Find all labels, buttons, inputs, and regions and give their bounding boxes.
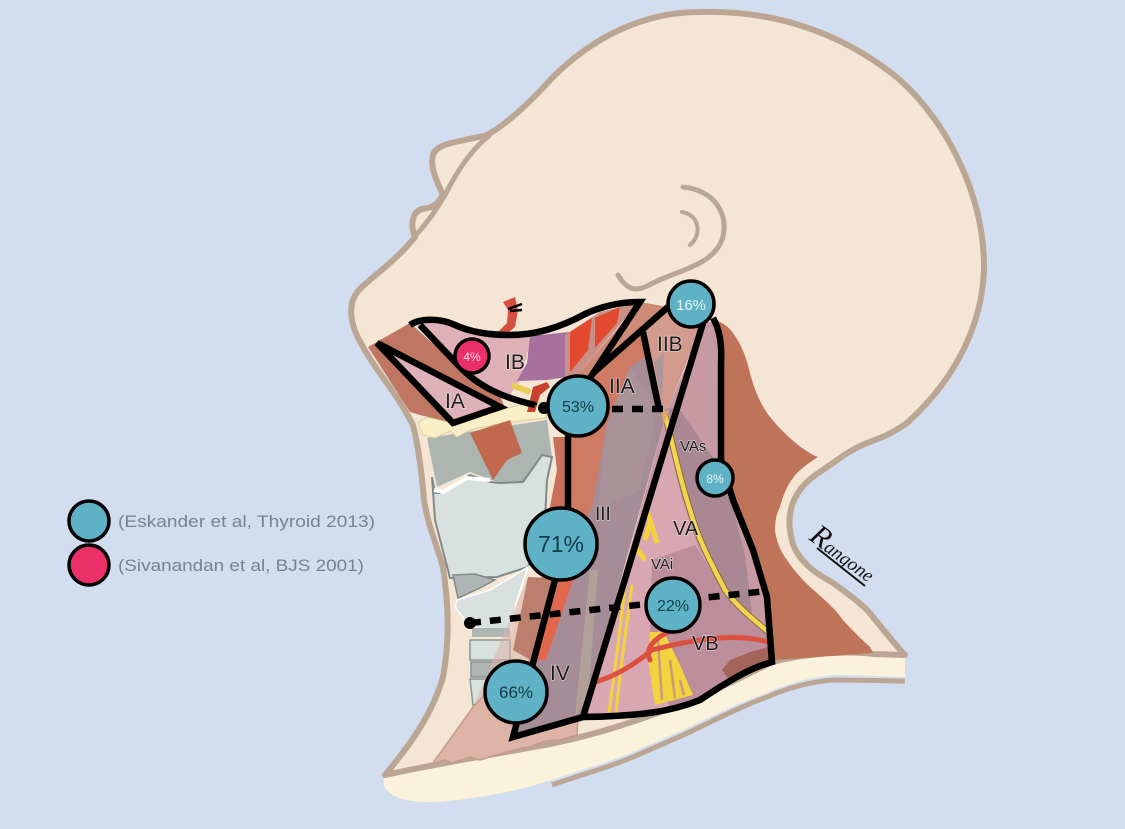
node percentages: 22% <box>657 598 689 615</box>
level labels: IV <box>550 662 570 685</box>
node percentages: 71% <box>538 531 584 557</box>
facial artery <box>497 297 518 337</box>
boundary: level IB <box>410 302 640 405</box>
level labels: IIB <box>657 333 683 356</box>
larynx and trachea <box>427 420 552 705</box>
boundary: posterior triangle oblique <box>583 323 703 717</box>
circle: 16 percent <box>668 281 714 327</box>
node percentages: 53% <box>562 399 594 416</box>
node percentages <box>463 297 724 702</box>
dashed line: II superior-inferior <box>612 406 665 412</box>
jugular and carotid in upper neck <box>565 303 638 378</box>
node percentages: 66% <box>499 683 533 702</box>
submandibular gland <box>517 332 569 381</box>
legend <box>69 501 375 585</box>
level labels: VB <box>692 633 719 655</box>
boundary: level V posterior <box>583 318 772 717</box>
level IIA, III, IV fill <box>513 333 668 737</box>
legend swatch: Sivanandan <box>69 545 109 585</box>
chest lower skin line <box>552 680 905 785</box>
node percentages: 16% <box>676 297 706 314</box>
level labels: VAi <box>651 556 673 573</box>
level IIB fill <box>643 307 703 410</box>
level labels: IA <box>445 390 465 413</box>
legend text: Eskander: (Eskander et al, Thyroid 2013) <box>118 512 375 531</box>
eye and nose inner lines <box>416 135 490 235</box>
dashed line: cricoid level <box>470 591 767 623</box>
circle: 53 percent <box>548 376 608 436</box>
accessory nerve <box>665 415 768 632</box>
node percentages: 8% <box>706 472 724 486</box>
node percentages: 4% <box>463 350 481 364</box>
circle: 4 percent <box>455 339 489 373</box>
posterior digastric <box>575 302 668 378</box>
ear <box>618 187 724 289</box>
boundary: levels III and IV <box>513 430 583 737</box>
level labels: IB <box>505 351 525 374</box>
signature: Rangone <box>803 517 883 588</box>
level V dark band <box>668 408 752 612</box>
level labels: VAs <box>680 438 706 455</box>
circle: 22 percent <box>646 578 700 632</box>
submental and digastric muscle <box>368 323 505 423</box>
posterior triangle muscle <box>710 318 873 660</box>
level labels: VA <box>673 518 699 540</box>
level labels <box>445 333 719 685</box>
level VB mauve fill <box>650 545 772 710</box>
illustration: head and neck <box>351 12 984 802</box>
boundary: level IA <box>377 343 500 423</box>
legend text: Sivanandan: (Sivanandan et al, BJS 2001) <box>118 556 364 575</box>
level labels: III <box>595 504 611 525</box>
level IA fill <box>378 343 500 423</box>
node circles <box>455 281 733 723</box>
strap muscle at sternum <box>433 577 578 763</box>
carotid strip beside level III <box>549 437 566 512</box>
chest skin band <box>383 650 905 802</box>
head silhouette <box>351 12 984 775</box>
reddish muscle beside boundary <box>568 333 648 545</box>
boundary: level IIA and IIB <box>593 307 668 409</box>
circle: 71 percent <box>525 508 597 580</box>
submandibular fill <box>415 323 532 395</box>
level V fill <box>585 322 772 716</box>
brachial plexus <box>609 510 693 713</box>
level VA lower left fill <box>585 440 772 716</box>
level labels: IIA <box>609 375 635 398</box>
clavicular muscle remnant <box>722 647 771 678</box>
circle: 66 percent <box>485 661 547 723</box>
transverse cervical artery <box>595 632 768 682</box>
neck level boundaries <box>377 302 772 737</box>
thyrohyoid muscle <box>470 420 522 480</box>
legend swatch: Eskander <box>69 501 109 541</box>
hyoid bone <box>418 402 546 438</box>
digastric tendon vessel <box>512 385 530 392</box>
circle: 8 percent <box>697 460 733 496</box>
